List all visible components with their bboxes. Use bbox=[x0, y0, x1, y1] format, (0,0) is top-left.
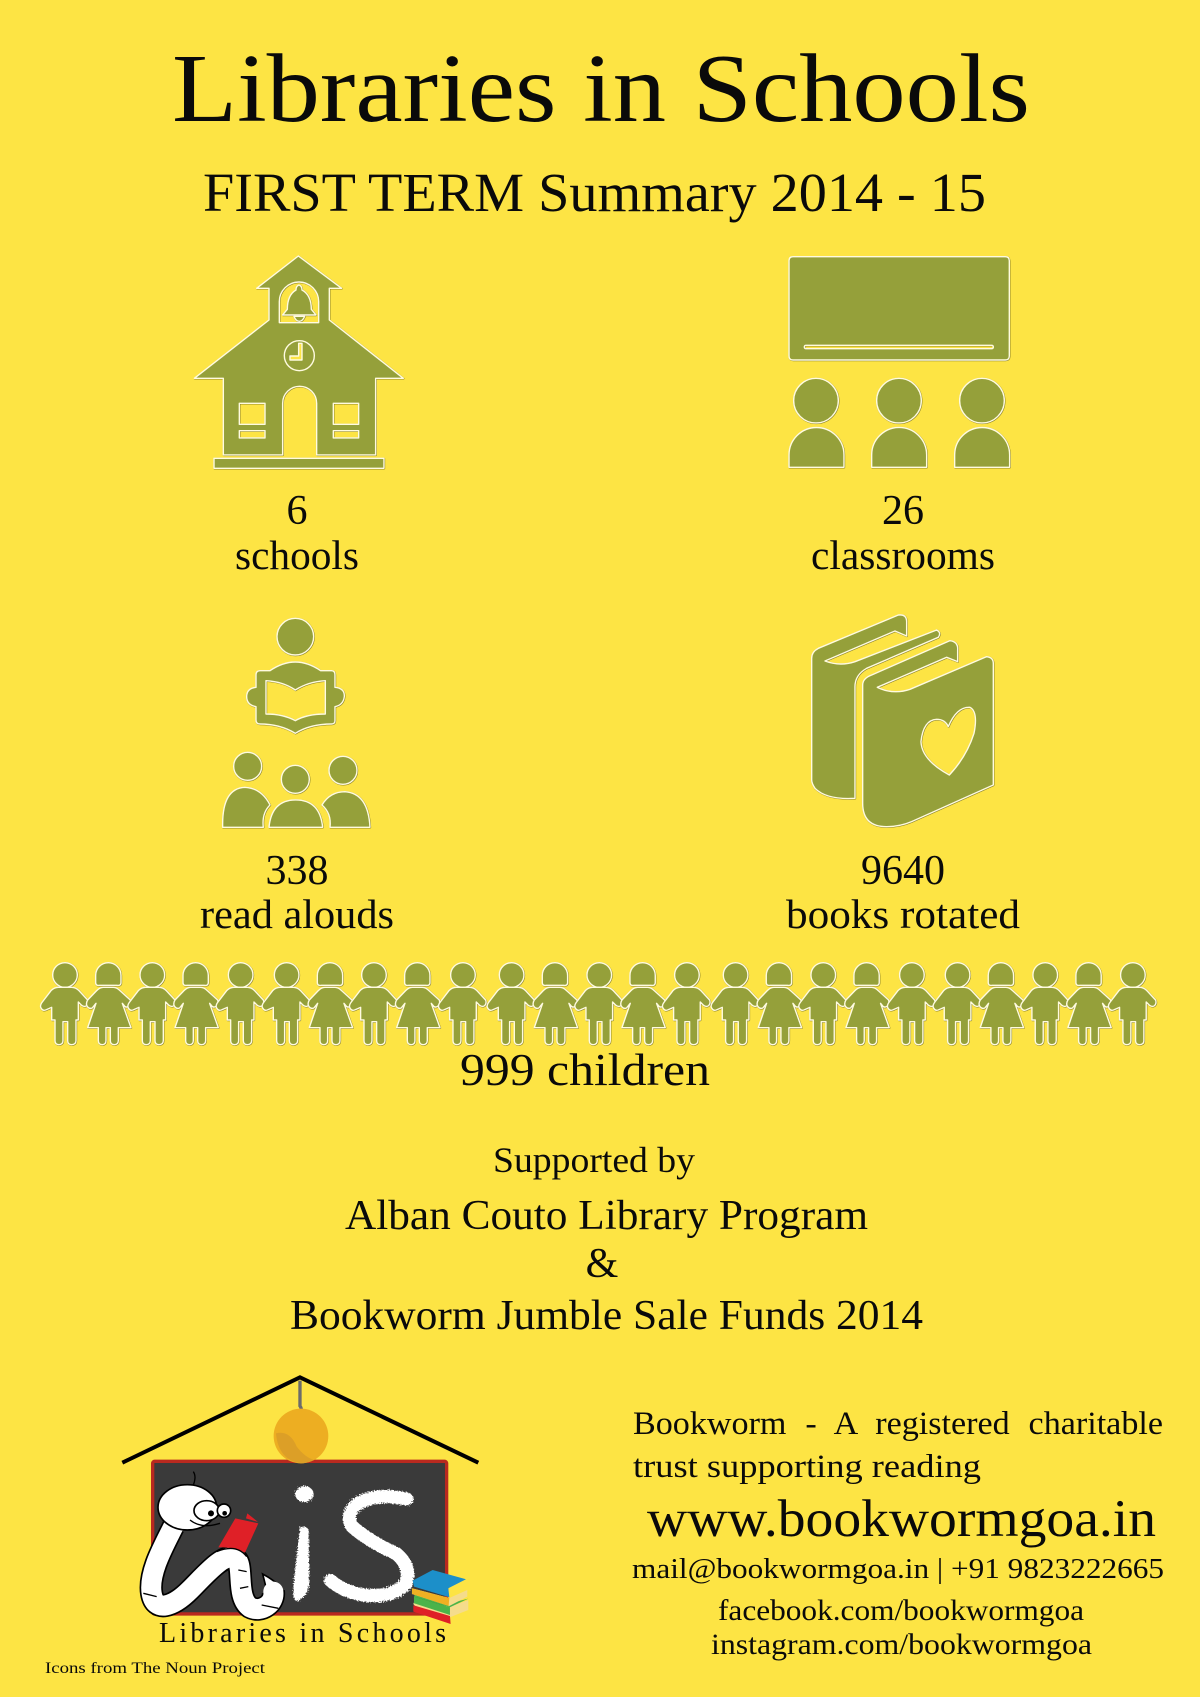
email and phone: mail@bookwormgoa.in | +91 9823222665 bbox=[632, 1553, 1164, 1585]
chalk letter i bbox=[293, 1486, 314, 1602]
subtitle: FIRST TERM Summary 2014 - 15 bbox=[203, 162, 986, 223]
logo roof bbox=[122, 1377, 478, 1463]
supported by: Supported by bbox=[493, 1140, 695, 1180]
ampersand: & bbox=[586, 1241, 618, 1287]
stack of books bbox=[412, 1570, 468, 1624]
icon: books with heart bbox=[812, 615, 993, 827]
title: Libraries in Schools bbox=[172, 35, 1030, 142]
number: 338: 338 bbox=[266, 848, 328, 894]
label: read alouds: read alouds bbox=[200, 891, 394, 937]
number: 6: 6 bbox=[286, 488, 308, 534]
label: schools: schools bbox=[235, 532, 359, 578]
trust description line 2: trust supporting reading bbox=[633, 1449, 981, 1485]
contact block bbox=[632, 1406, 1164, 1661]
icon: classroom bbox=[789, 257, 1010, 467]
logo orange disc bbox=[274, 1409, 328, 1463]
icon: read aloud bbox=[223, 618, 370, 827]
icon credit: Icons from The Noun Project bbox=[45, 1660, 266, 1677]
trust description line 1: Bookworm - A registered charitable bbox=[633, 1406, 1163, 1442]
logo: Libraries in Schools bbox=[122, 1377, 478, 1624]
program name: Alban Couto Library Program bbox=[345, 1193, 868, 1239]
funds name: Bookworm Jumble Sale Funds 2014 bbox=[290, 1293, 923, 1339]
stat: read alouds bbox=[200, 848, 394, 937]
label: 999 children: 999 children bbox=[460, 1044, 710, 1095]
facebook: facebook.com/bookwormgoa bbox=[718, 1594, 1084, 1627]
number: 26: 26 bbox=[882, 488, 924, 534]
icon: row of children bbox=[41, 963, 1156, 1045]
worm mascot bbox=[143, 1472, 283, 1616]
website: www.bookwormgoa.in bbox=[647, 1490, 1156, 1548]
chalk letter s bbox=[331, 1497, 408, 1596]
logo caption: Libraries in Schools bbox=[159, 1618, 446, 1649]
number: 9640: 9640 bbox=[861, 848, 945, 894]
logo board bbox=[153, 1461, 447, 1614]
label: books rotated: books rotated bbox=[786, 891, 1020, 937]
stat: books rotated bbox=[786, 848, 1020, 937]
logo hook bbox=[295, 1381, 301, 1414]
icon: school house bbox=[194, 256, 403, 468]
stat: schools bbox=[235, 488, 359, 578]
label: classrooms: classrooms bbox=[811, 532, 995, 578]
support text bbox=[290, 1140, 923, 1339]
instagram: instagram.com/bookwormgoa bbox=[711, 1628, 1092, 1661]
stat: classrooms bbox=[811, 488, 995, 578]
